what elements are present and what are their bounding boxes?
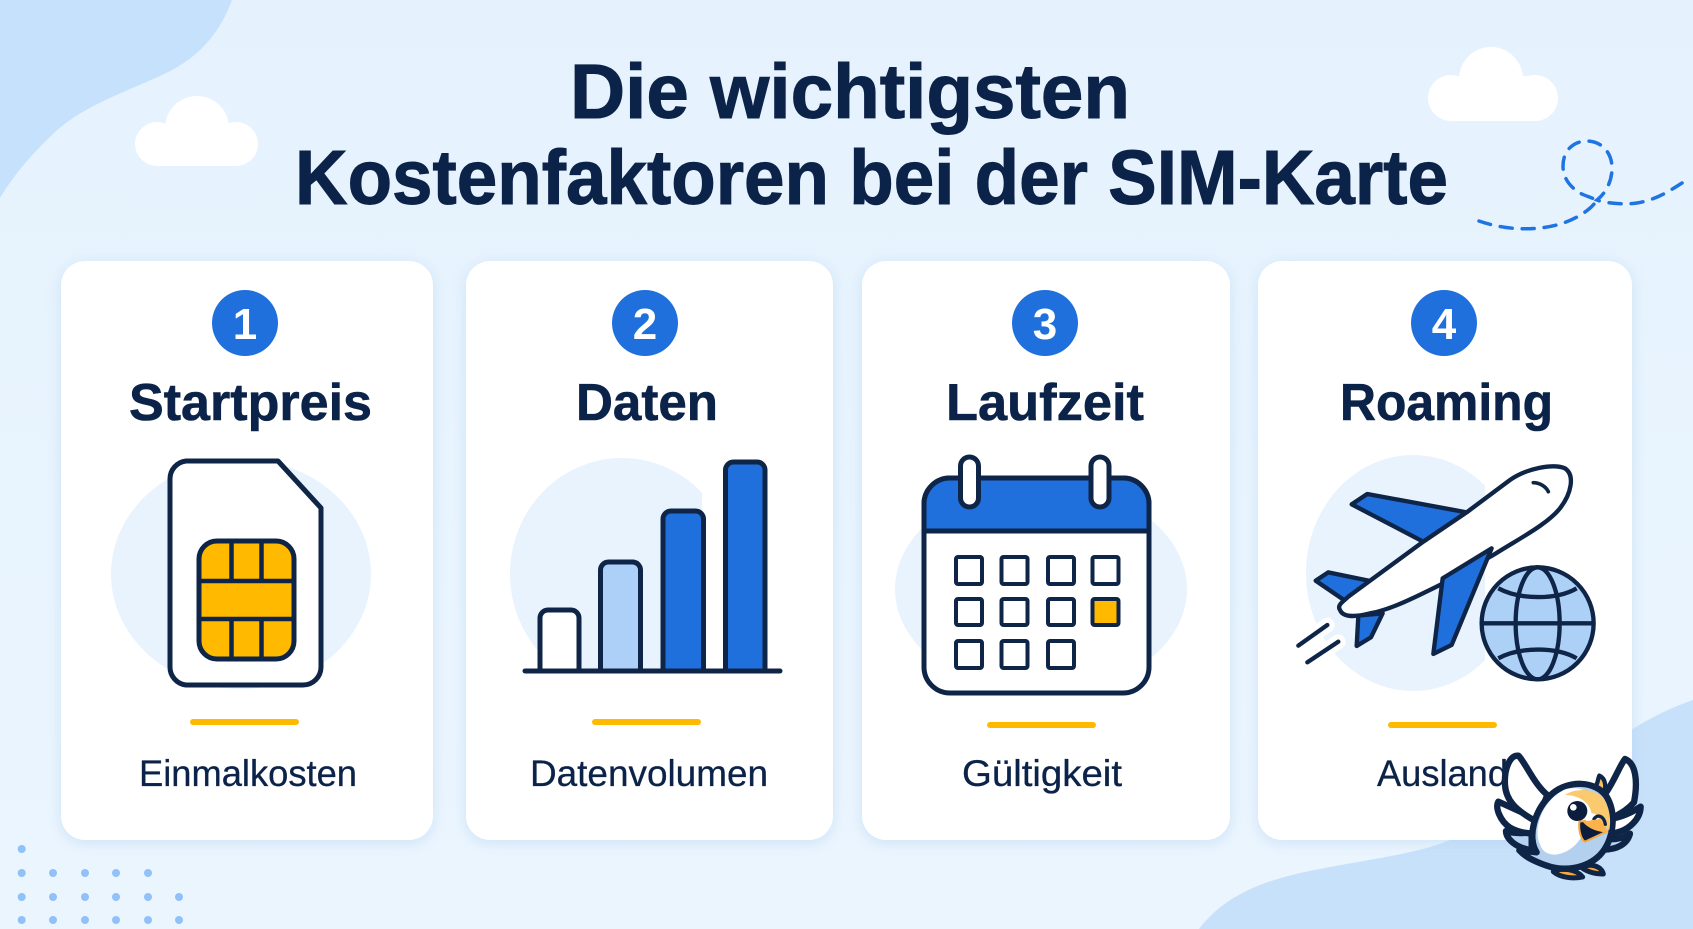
title — [295, 49, 1448, 221]
belly and face — [1538, 788, 1609, 855]
decorative blob: top left — [0, 0, 232, 198]
heading: Roaming: Roaming — [1340, 374, 1553, 432]
cloud: right — [1428, 47, 1558, 121]
calendar rings — [960, 457, 1109, 507]
number badge 3: 3 — [1033, 300, 1057, 349]
speed lines — [1298, 625, 1338, 662]
accent line — [592, 719, 701, 725]
number badge 2 — [612, 290, 678, 356]
number badge 2: 2 — [633, 300, 657, 349]
title: Kostenfaktoren bei der SIM-Karte — [295, 135, 1448, 221]
label: Gültigkeit: Gültigkeit — [962, 753, 1123, 794]
icon: calendar — [895, 457, 1187, 694]
heading: Laufzeit: Laufzeit — [946, 374, 1144, 432]
panel: Laufzeit — [862, 261, 1230, 840]
title: Die wichtigsten — [570, 49, 1130, 135]
label: Einmalkosten: Einmalkosten — [139, 753, 357, 794]
number badge 1 — [212, 290, 278, 356]
accent line — [1388, 722, 1497, 728]
mascot: bird — [1497, 756, 1641, 878]
plane cockpit — [1533, 483, 1548, 492]
crest — [1592, 776, 1605, 795]
right wing — [1603, 759, 1641, 850]
plane body — [1339, 466, 1571, 616]
number badge 1: 1 — [233, 300, 257, 349]
eye — [1567, 801, 1587, 821]
heading: Daten: Daten — [576, 374, 718, 432]
heading: Startpreis: Startpreis — [129, 374, 372, 432]
dashed flight path — [1479, 141, 1682, 229]
number badge 3 — [1012, 290, 1078, 356]
plane lower wing — [1433, 548, 1492, 654]
beak and mouth — [1579, 816, 1609, 842]
number badge 4: 4 — [1432, 300, 1457, 349]
panel: Startpreis — [61, 261, 433, 840]
decorative blob: bottom right — [1199, 700, 1693, 929]
left wing — [1497, 756, 1547, 850]
cloud: left — [135, 96, 258, 166]
number badge 4 — [1411, 290, 1477, 356]
dot pattern — [18, 845, 183, 924]
globe — [1482, 567, 1594, 679]
head patch — [1565, 790, 1610, 830]
calendar days — [956, 557, 1118, 668]
icon: airplane and globe — [1298, 455, 1594, 691]
plane wings and tail — [1316, 494, 1467, 646]
label: Ausland: Ausland — [1377, 753, 1508, 794]
icon: SIM card — [111, 459, 371, 689]
body — [1519, 784, 1613, 869]
panel: Daten — [466, 261, 833, 840]
panel: Roaming — [1258, 261, 1632, 840]
accent line — [987, 722, 1096, 728]
feet — [1553, 865, 1603, 878]
accent line — [190, 719, 299, 725]
bar chart — [510, 458, 780, 690]
label: Datenvolumen: Datenvolumen — [530, 753, 768, 794]
